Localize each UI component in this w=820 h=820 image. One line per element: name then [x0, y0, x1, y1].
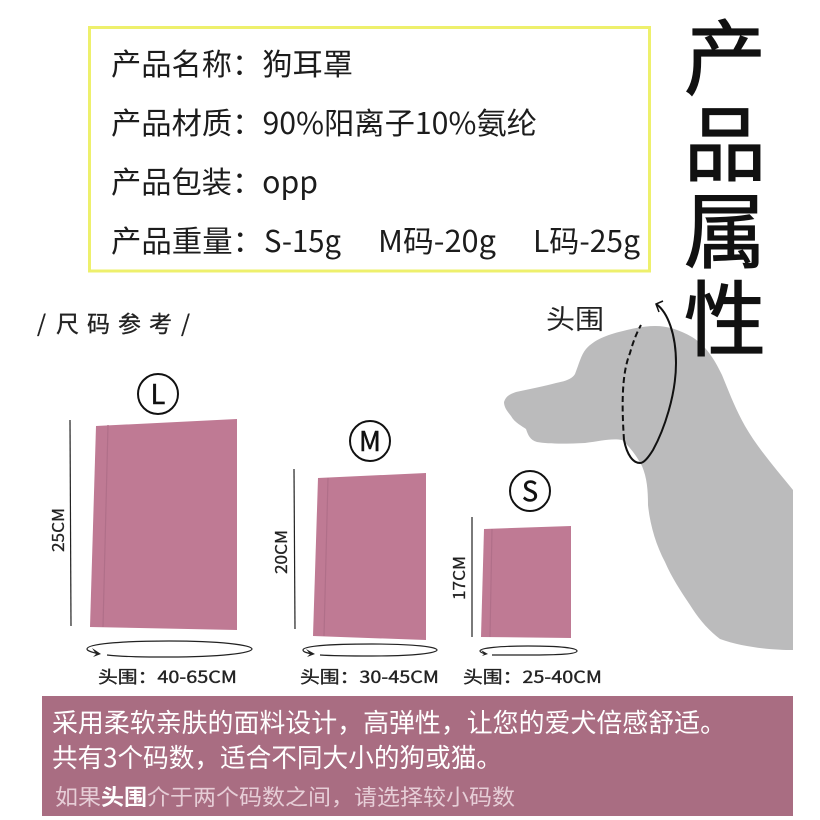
S fabric [481, 526, 571, 638]
vertical title: 属 [684, 166, 766, 285]
panel: description [42, 696, 793, 816]
panel: product info [90, 28, 650, 271]
L head size label: 头围：40-65CM [98, 663, 237, 688]
vertical title: 性 [684, 254, 766, 373]
vertical title [684, 0, 766, 373]
product weight row: S-15g [264, 217, 341, 261]
vertical title: 品 [684, 79, 766, 198]
size S badge: S [522, 470, 538, 509]
S width ellipse [480, 646, 577, 656]
size reference heading: 尺码参考 [56, 305, 172, 339]
product: size L [45, 373, 252, 688]
product: size S [446, 470, 602, 688]
size M badge: M [359, 420, 381, 459]
product name row: 产品名称：狗耳罩 [111, 40, 353, 84]
size reference heading: / [37, 305, 46, 339]
head circumference ring with arrow [623, 301, 676, 463]
product packaging row: 产品包装：opp [111, 158, 318, 202]
size reference heading: / [181, 305, 190, 339]
product: size M [268, 420, 439, 688]
S height label: 17CM [446, 556, 470, 600]
size L badge [138, 373, 178, 414]
S height line [471, 517, 473, 637]
L height line [70, 420, 71, 626]
size S badge [510, 470, 550, 511]
M width ellipse [303, 644, 437, 657]
size M badge [350, 420, 390, 461]
product weight row: 产品重量： [111, 217, 263, 261]
L fabric [90, 419, 237, 630]
L width ellipse [87, 641, 252, 657]
head label: 头围 [546, 298, 604, 337]
product weight row: M码-20g [378, 217, 496, 261]
size L badge: L [151, 373, 165, 412]
product weight row: L码-25g [533, 217, 640, 261]
description line 2: 共有3个码数，适合不同大小的狗或猫。 [52, 738, 502, 775]
M head size label: 头围：30-45CM [300, 663, 439, 688]
product material row: 产品材质：90%阳离子10%氨纶 [111, 99, 537, 143]
M fabric [313, 473, 426, 640]
product weight row [111, 217, 640, 261]
M height label: 20CM [268, 530, 292, 574]
M height line [294, 469, 295, 629]
dog silhouette [504, 326, 793, 650]
S head size label: 头围：25-40CM [463, 663, 602, 688]
size advice note: 如果头围介于两个码数之间，请选择较小码数 [55, 780, 515, 812]
description line 1: 采用柔软亲肤的面料设计，高弹性，让您的爱犬倍感舒适。 [52, 703, 726, 740]
L height label: 25CM [45, 508, 69, 552]
